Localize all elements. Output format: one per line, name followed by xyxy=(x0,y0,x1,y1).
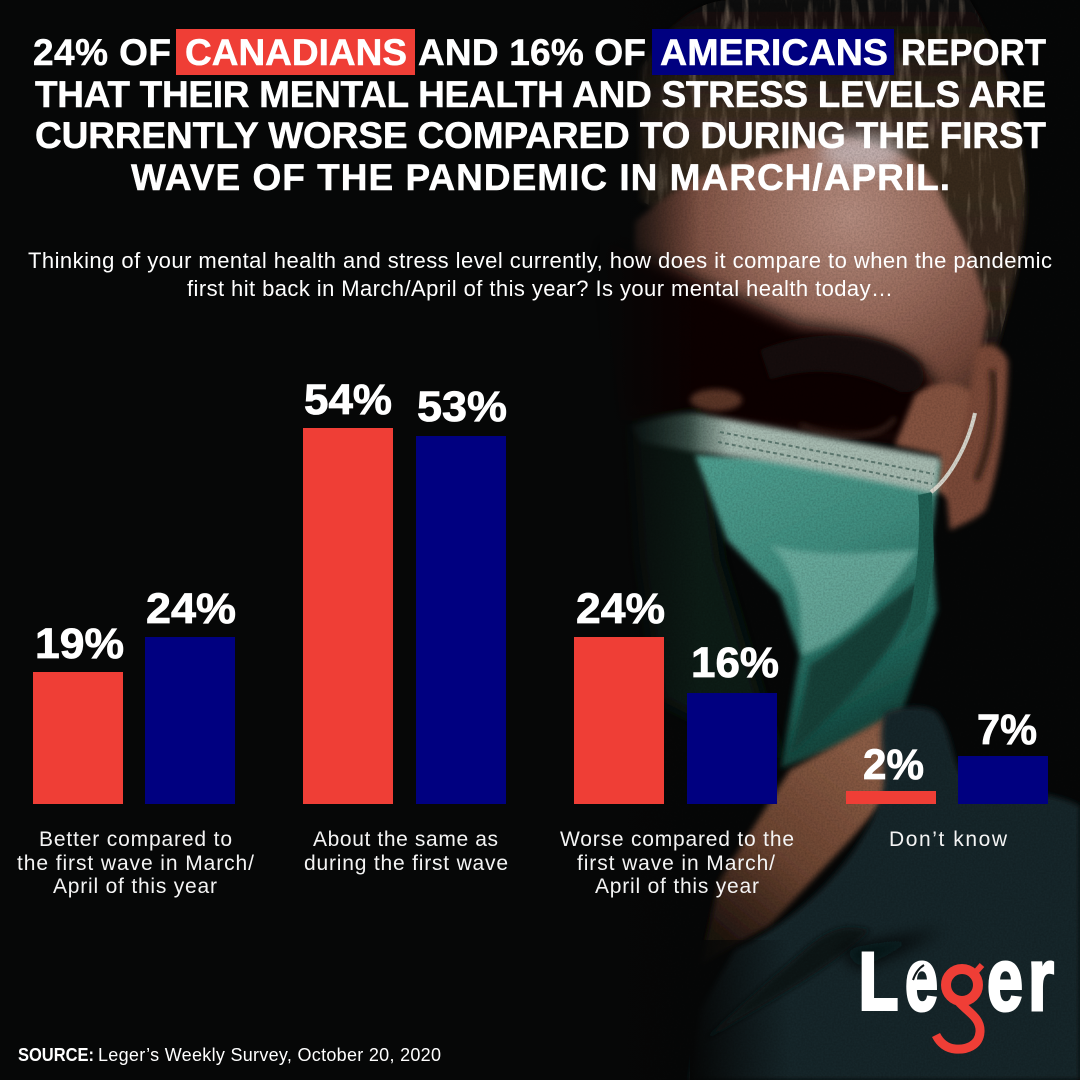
highlight: Canadians xyxy=(176,29,415,75)
logo: Leger: L xyxy=(859,937,898,1027)
survey question: first hit back in March/April of this year? Is your mental health today… xyxy=(187,276,893,301)
category label: Worse compared to the xyxy=(560,828,794,851)
title line 2: THAT THEIR MENTAL HEALTH AND STRESS LEVELS ARE xyxy=(35,74,1046,115)
category label: Better compared to xyxy=(39,828,232,851)
category: better xyxy=(17,585,254,898)
value 24%: 24% xyxy=(146,585,236,633)
category label xyxy=(304,828,508,875)
bar chart xyxy=(17,376,1048,898)
eyebrow xyxy=(760,335,924,392)
title line 1: AMERICANS xyxy=(660,32,888,73)
forehead xyxy=(630,138,988,445)
hoodie shadow fold xyxy=(705,927,870,1040)
category label xyxy=(17,828,254,898)
forehead highlight xyxy=(820,132,904,172)
logo: Leger xyxy=(859,929,1054,1049)
category label: during the first wave xyxy=(304,852,508,875)
title line 1: REPORT xyxy=(901,32,1046,73)
category: don't know xyxy=(846,706,1048,851)
value 16%: 16% xyxy=(691,639,779,687)
value 2%: 2% xyxy=(863,741,924,789)
mask pleat lines xyxy=(718,432,934,484)
category label: Don’t know xyxy=(889,828,1008,851)
value 53%: 53% xyxy=(417,383,507,431)
category: worse xyxy=(560,585,794,898)
hair xyxy=(640,0,1025,400)
icon: stylised red g xyxy=(936,965,982,1049)
mask fold highlight xyxy=(770,545,918,655)
title line 1: 24% OF xyxy=(33,32,171,73)
accent cut in first e xyxy=(913,965,924,980)
logo: Leger: e xyxy=(905,929,938,1029)
category label: About the same as xyxy=(313,828,498,851)
logo: Leger: r xyxy=(1028,929,1054,1029)
category label: first wave in March/ xyxy=(577,852,775,875)
hair strands xyxy=(642,0,1025,346)
mask ear strap xyxy=(931,413,975,492)
fabric grain xyxy=(620,0,1080,1080)
bar: Canadians 24% xyxy=(574,637,664,804)
value 7%: 7% xyxy=(977,706,1037,754)
hoodie shadow at top right xyxy=(840,930,945,968)
left fade xyxy=(600,0,700,1080)
title xyxy=(33,29,1046,198)
bar: Americans 7% xyxy=(958,756,1048,804)
bar: Americans 16% xyxy=(687,693,777,804)
category: about the same xyxy=(303,376,508,875)
bar: Canadians 2% xyxy=(846,791,936,804)
hoodie left fade xyxy=(690,940,790,1080)
survey question xyxy=(28,248,1052,301)
highlight: Americans xyxy=(652,29,894,75)
shadow over the brow and eye xyxy=(600,240,936,446)
inner ear shadow xyxy=(976,370,994,480)
mask shaded side xyxy=(632,412,780,760)
mask top pleated band xyxy=(632,414,940,494)
mask right edge xyxy=(905,492,934,640)
title line 1 xyxy=(33,32,1046,73)
category label xyxy=(560,828,794,898)
mask body xyxy=(695,455,940,768)
title line 3: CURRENTLY WORSE COMPARED TO DURING THE FIRST xyxy=(35,115,1046,156)
cheek beside the eye xyxy=(895,383,975,510)
title line 1: AND 16% OF xyxy=(418,32,646,73)
value 24%: 24% xyxy=(576,585,665,633)
source note: Leger’s Weekly Survey, October 20, 2020 xyxy=(98,1045,441,1065)
photo: man wearing a surgical mask xyxy=(600,0,1080,1080)
category label: April of this year xyxy=(53,875,217,898)
bar: Canadians 19% xyxy=(33,672,123,804)
source note: SOURCE: xyxy=(18,1045,94,1065)
mask fold shadow xyxy=(790,575,925,755)
logo: Leger: e xyxy=(987,929,1023,1029)
hoodie xyxy=(690,707,1080,1080)
title line 1: CANADIANS xyxy=(185,32,407,73)
bar: Americans 53% xyxy=(416,436,506,804)
bar: Canadians 54% xyxy=(303,428,393,804)
survey question: Thinking of your mental health and stress level currently, how does it compare to when the pandemic xyxy=(28,248,1052,273)
bar: Americans 24% xyxy=(145,637,235,804)
closed eye lid xyxy=(800,418,895,435)
category label: April of this year xyxy=(595,875,759,898)
value 19%: 19% xyxy=(35,620,124,668)
ear xyxy=(945,345,1008,530)
category label: the first wave in March/ xyxy=(17,852,254,875)
neck xyxy=(700,710,918,965)
nose bridge xyxy=(690,389,742,411)
title line 4: WAVE OF THE PANDEMIC IN MARCH/APRIL. xyxy=(131,157,950,198)
value 54%: 54% xyxy=(304,376,392,424)
